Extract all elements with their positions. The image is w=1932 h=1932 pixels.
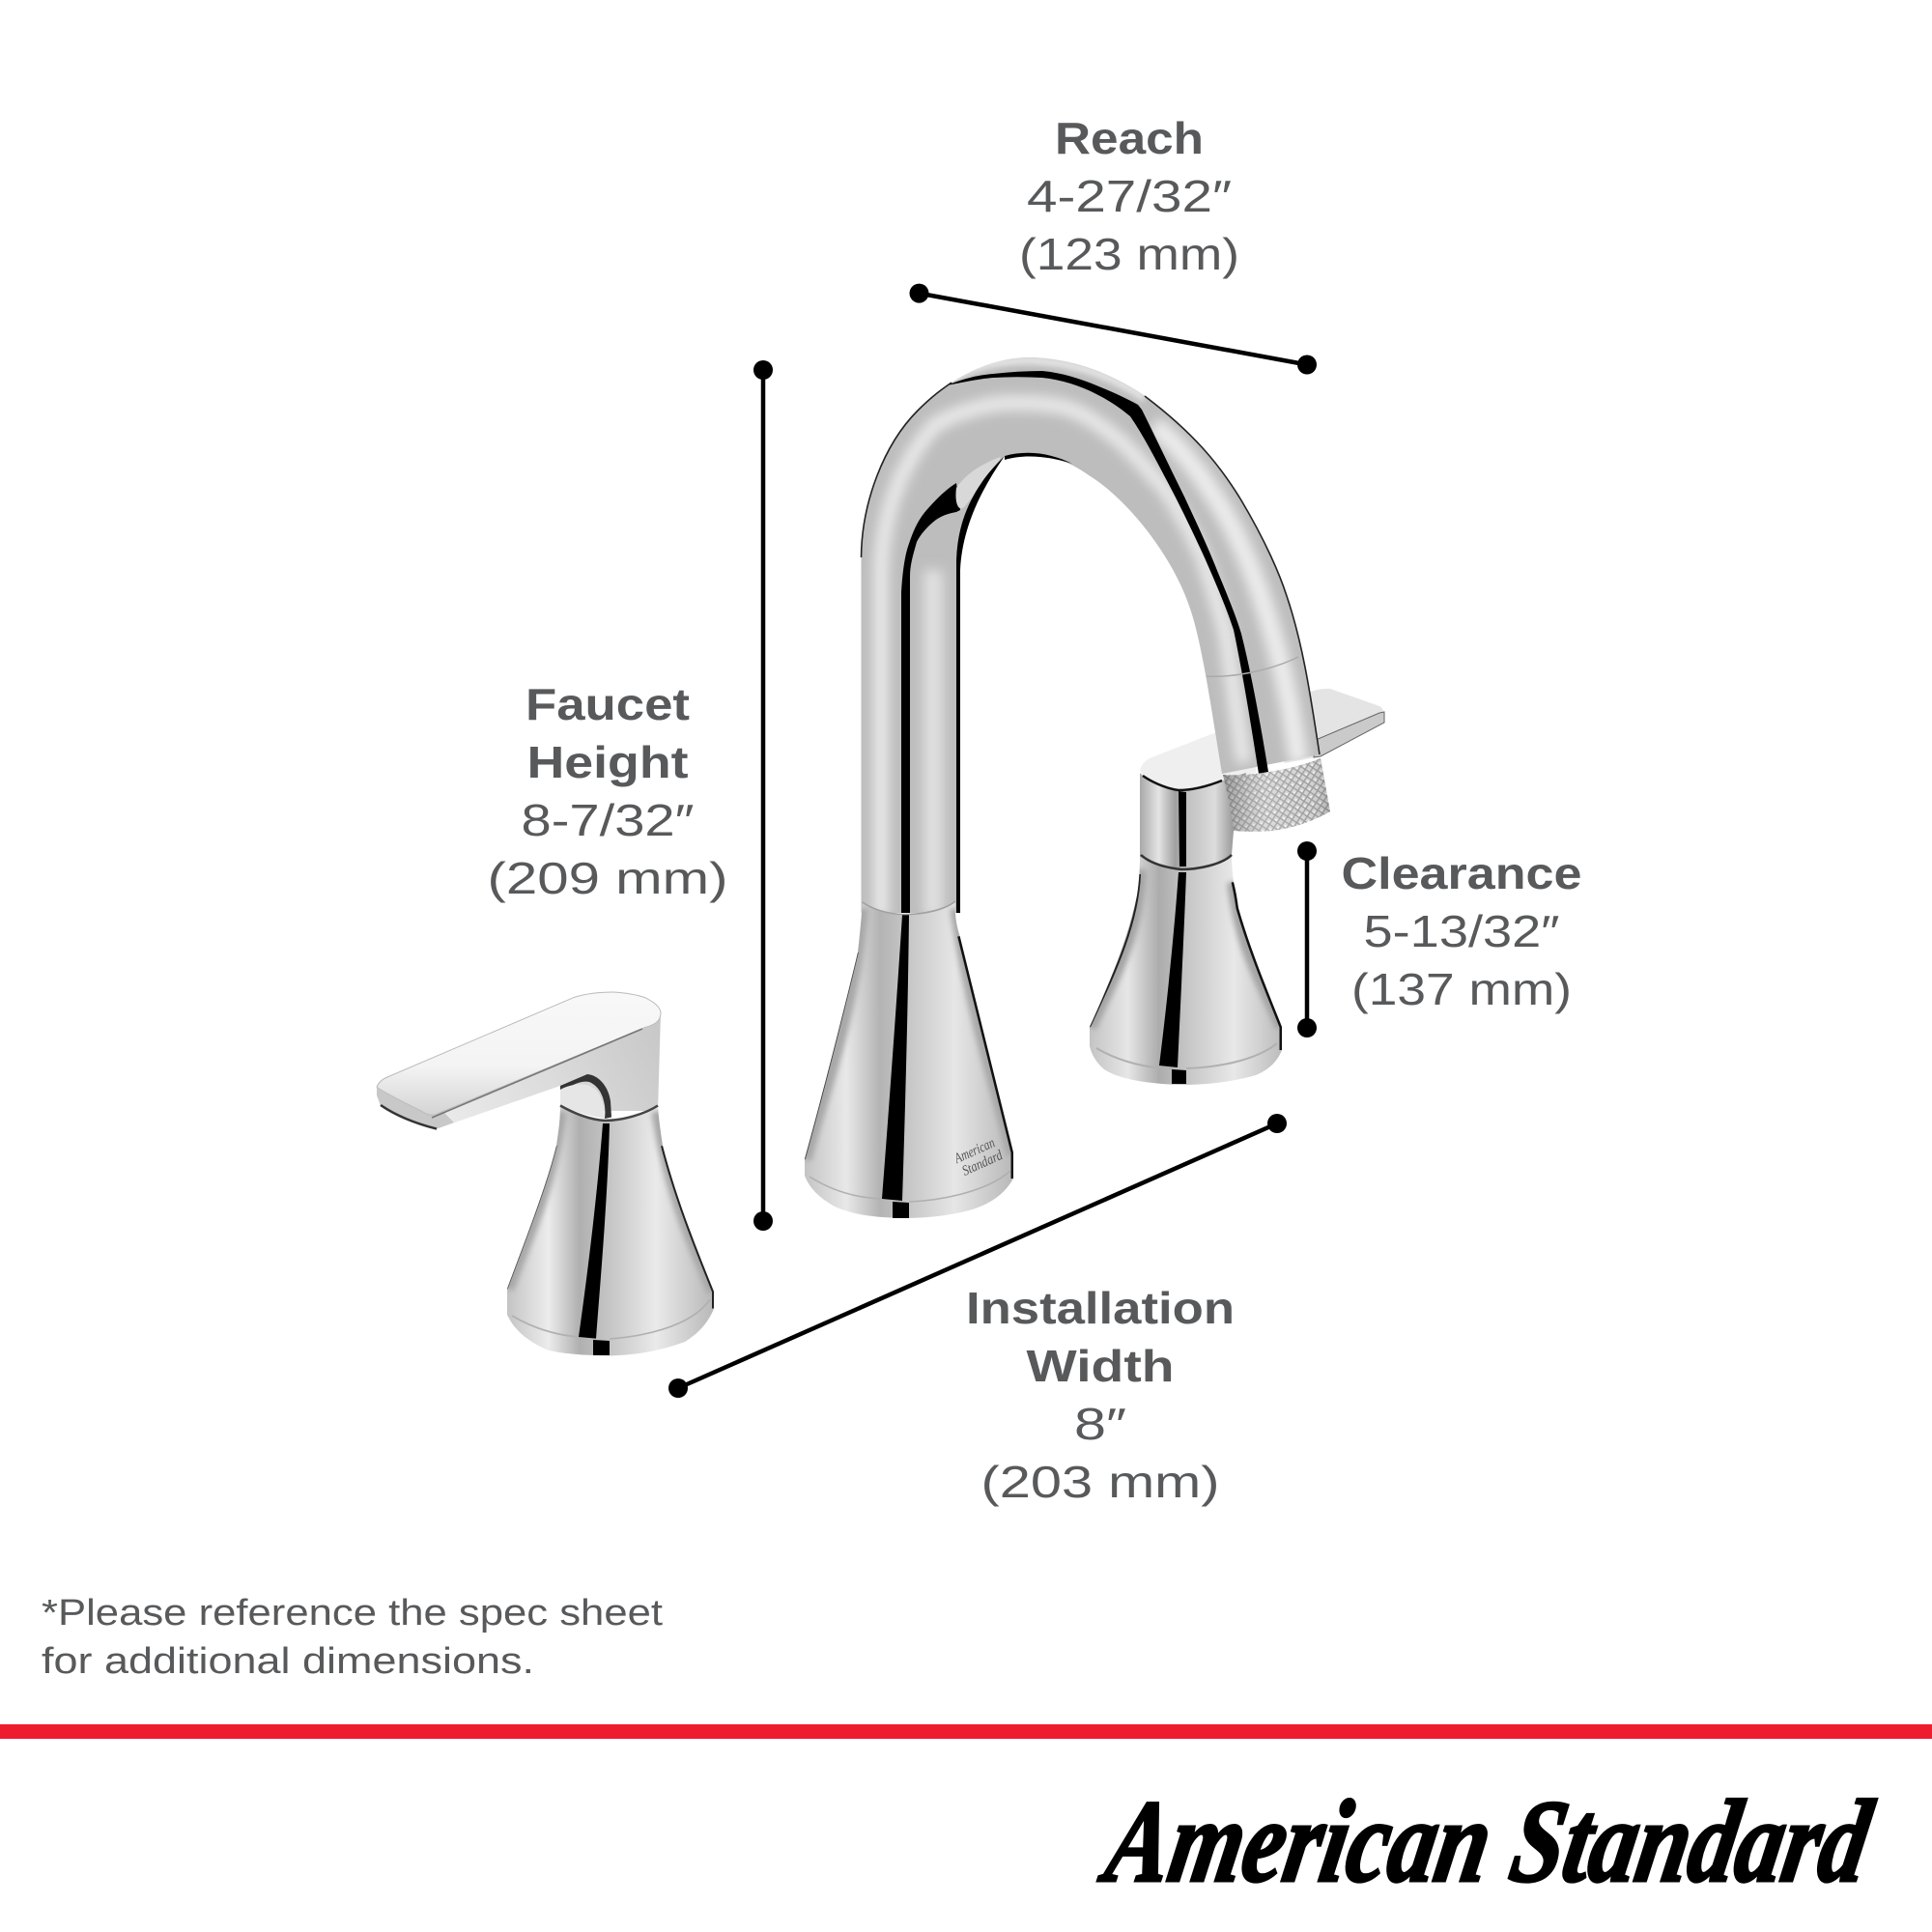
cone edge shading (507, 1111, 714, 1308)
ring groove (560, 1105, 658, 1121)
label: installation width: Installation (966, 1283, 1235, 1333)
base black stripe (882, 915, 909, 1218)
base rim (512, 1299, 710, 1339)
lever near end (1140, 717, 1256, 790)
dimension line: installation width (668, 1114, 1287, 1398)
neck highlight (560, 1084, 605, 1119)
engraved faucet logo: American (952, 1135, 998, 1167)
engraved faucet logo (952, 1134, 1006, 1180)
footnote (42, 1593, 664, 1682)
lever groove (432, 1029, 642, 1118)
label: installation width: (203 mm) (981, 1457, 1219, 1507)
label: clearance: Clearance (1341, 848, 1582, 898)
base edge shading (805, 908, 1013, 1179)
label: faucet height: (209 mm) (487, 853, 728, 903)
right handle (1090, 689, 1384, 1085)
red divider bar (0, 1724, 1932, 1739)
label: clearance (1341, 848, 1582, 1014)
handle cone (507, 1105, 714, 1355)
inner arch dark edge (956, 456, 1005, 913)
left handle (377, 992, 714, 1355)
lever far end underside (1314, 712, 1384, 757)
black reflection along spout (947, 371, 1268, 774)
spout tube (862, 357, 1320, 913)
label: reach: Reach (1055, 113, 1204, 163)
label: installation width: Width (1026, 1341, 1175, 1391)
dimension line: clearance (1297, 841, 1317, 1037)
label: faucet height (487, 679, 728, 903)
base rim (1096, 1043, 1277, 1068)
footnote: for additional dimensions. (42, 1641, 534, 1682)
lever edge (1143, 776, 1222, 790)
label: clearance: 5-13/32″ (1364, 906, 1559, 956)
inner arch highlight (955, 457, 1001, 508)
label: faucet height: Faucet (526, 679, 690, 729)
handle stripes (1159, 791, 1186, 1084)
knurled aerator (1223, 758, 1330, 832)
label: reach (1019, 113, 1239, 279)
label: reach: (123 mm) (1019, 229, 1239, 279)
tube shading (881, 360, 1299, 918)
label: reach: 4-27/32″ (1027, 171, 1232, 221)
handle black stripe (579, 1123, 610, 1355)
handle arm (432, 1012, 661, 1129)
label: faucet height: Height (527, 737, 688, 787)
handle cylinder (1140, 773, 1246, 869)
spout outer dark edge (862, 383, 1320, 754)
ring groove (1141, 855, 1232, 869)
label: installation width (966, 1283, 1235, 1507)
engraved faucet logo: Standard (960, 1148, 1006, 1179)
dimension line: reach (910, 284, 1317, 375)
black reflection on left stem (901, 483, 960, 913)
footnote: *Please reference the spec sheet (42, 1593, 664, 1634)
cone edge shading (1090, 869, 1282, 1050)
label: installation width: 8″ (1074, 1399, 1126, 1449)
lever front edge (377, 1088, 454, 1129)
label: faucet height: 8-7/32″ (522, 795, 694, 845)
collar seam (863, 901, 955, 915)
label: clearance: (137 mm) (1351, 964, 1572, 1014)
handle cone (1090, 855, 1282, 1085)
base rim (810, 1171, 1010, 1202)
lever top surface (377, 992, 661, 1115)
inner elbow (560, 1074, 611, 1119)
base cone (805, 901, 1013, 1218)
lever far end (1256, 689, 1384, 763)
dimension line: faucet height (753, 360, 773, 1231)
spout seam line (1207, 657, 1298, 676)
main faucet (805, 357, 1330, 1218)
